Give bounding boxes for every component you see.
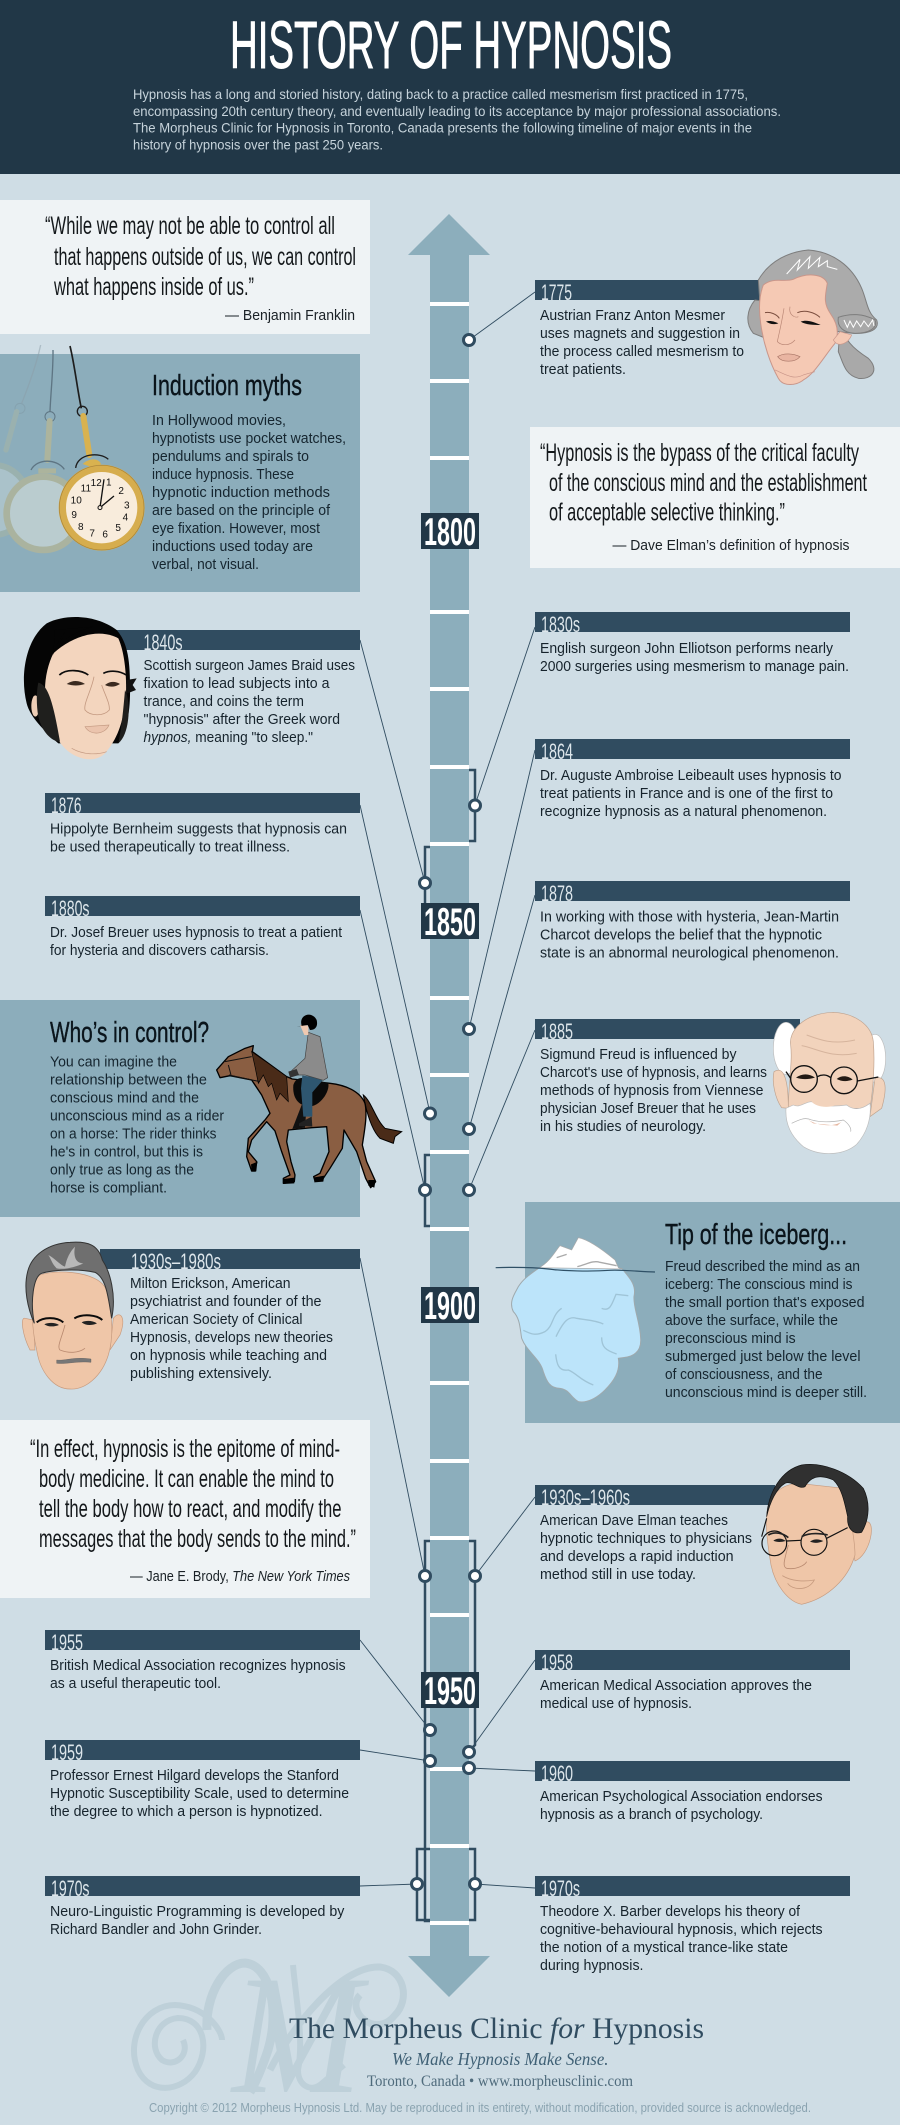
event: 1930s-1960s Dave Elman: 1930s–1960s	[541, 1485, 630, 1510]
event: 1970s Theodore Barber: the notion of a mystical trance-like state	[540, 1940, 788, 1956]
century marker 1950	[421, 1670, 479, 1713]
event: 1840s Braid: "hypnosis" after the Greek word	[144, 712, 340, 728]
event: 1885 Freud: Charcot's use of hypnosis, and learns	[540, 1065, 767, 1081]
body text: of consciousness, and the	[665, 1367, 823, 1383]
event: 1775 Mesmer: uses magnets and suggestion in	[540, 326, 740, 342]
event: 1880s Breuer	[45, 896, 360, 959]
event: 1878 Charcot: 1878	[541, 881, 573, 906]
event: 1878 Charcot: In working with those with hysteria, Jean-Martin	[540, 910, 839, 926]
body text: the small portion that's exposed	[665, 1295, 864, 1311]
panel: induction myths	[0, 345, 360, 592]
body text: he's in control, but this is	[50, 1144, 203, 1160]
event: 1775 Mesmer: 1775	[541, 280, 572, 305]
event: 1970s Theodore Barber: during hypnosis.	[540, 1958, 644, 1974]
quote: Benjamin Franklin	[0, 200, 370, 334]
icon: swinging pocket watches: 8	[78, 522, 84, 533]
event: 1840s Braid: hypnos, meaning "to sleep."	[144, 730, 313, 746]
icon: swinging pocket watches: 1	[106, 477, 112, 488]
icon: swinging pocket watches: 10	[71, 495, 82, 506]
event: 1970s Theodore Barber: 1970s	[541, 1876, 580, 1901]
body text: hypnotists use pocket watches,	[152, 431, 346, 447]
event: 1878 Charcot: state is an abnormal neurological phenomenon.	[540, 946, 839, 962]
body text	[665, 1259, 867, 1401]
body text: conscious mind and the	[50, 1090, 199, 1106]
event: 1885 Freud	[535, 1019, 800, 1135]
icon: swinging pocket watches: 7	[89, 529, 95, 540]
body text: on a horse: The rider thinks	[50, 1126, 216, 1142]
event: 1830s Elliotson	[535, 612, 850, 675]
illustration: horse and rider	[217, 1015, 402, 1188]
quote: Jane E. Brody: messages that the body sends to the mind.”	[39, 1525, 356, 1553]
event: 1959 Hilgard: the degree to which a person is hypnotized.	[50, 1804, 323, 1820]
body text: relationship between the	[50, 1072, 207, 1088]
icon: iceberg	[496, 1238, 655, 1402]
body text: iceberg: The conscious mind is	[665, 1277, 852, 1293]
body text: above the surface, while the	[665, 1313, 838, 1329]
event: 1885 Freud: Sigmund Freud is influenced by	[540, 1047, 737, 1063]
century marker 1900	[421, 1285, 479, 1328]
intro paragraph: history of hypnosis over the past 250 years.	[133, 136, 383, 152]
body text	[50, 1054, 224, 1196]
event: 1960 American Psychological Association: American Psychological Association endorses	[540, 1789, 823, 1805]
event: 1958 American Medical Association: medical use of hypnosis.	[540, 1696, 692, 1712]
body text: inductions used today are	[152, 539, 313, 555]
event: 1970s Neuro-Linguistic Programming: 1970s	[51, 1876, 90, 1901]
event: 1955 British Medical Association: 1955	[51, 1630, 83, 1655]
century marker 1950: 1950	[424, 1670, 476, 1713]
panel: tip of the iceberg	[496, 1202, 900, 1423]
panel: who's in control	[0, 1000, 360, 1217]
body text: induce hypnosis. These	[152, 467, 294, 483]
event: 1880s Breuer: Dr. Josef Breuer uses hypnosis to treat a patient	[50, 925, 342, 941]
quote: Jane E. Brody: “In effect, hypnosis is the epitome of mind-	[30, 1435, 340, 1463]
icon: swinging pocket watches: 9	[71, 510, 77, 521]
intro paragraph: encompassing 20th century theory, and eventually leading to its acceptance by major professional associations.	[133, 103, 781, 119]
intro paragraph	[133, 86, 781, 152]
quote: Jane E. Brody: body medicine. It can enable the mind to	[39, 1465, 334, 1493]
quote: Dave Elman	[530, 427, 900, 568]
footer logo monogram: M	[230, 1941, 370, 2125]
event: 1960 American Psychological Association	[535, 1761, 850, 1823]
timeline double-headed arrow	[408, 214, 490, 1997]
event: 1930s-1980s Erickson	[100, 1249, 360, 1382]
event: 1876 Bernheim	[45, 793, 360, 856]
event: 1970s Neuro-Linguistic Programming	[45, 1876, 360, 1938]
event: 1958 American Medical Association: 1958	[541, 1650, 573, 1675]
quote: Benjamin Franklin: — Benjamin Franklin	[225, 307, 355, 324]
body text: only true as long as the	[50, 1162, 194, 1178]
body text: You can imagine the	[50, 1054, 177, 1070]
body text: are based on the principle of	[152, 503, 331, 519]
event: 1930s-1960s Dave Elman: hypnotic techniques to physicians	[540, 1531, 752, 1547]
event: 1775 Mesmer: Austrian Franz Anton Mesmer	[540, 308, 725, 324]
body text: submerged just below the level	[665, 1349, 860, 1365]
quote: Benjamin Franklin: that happens outside of us, we can control	[54, 243, 356, 271]
quote: Jane E. Brody	[0, 1420, 370, 1598]
quote: Benjamin Franklin: what happens inside of us.”	[53, 273, 254, 301]
body text: hypnotic induction methods	[152, 485, 330, 501]
century marker 1850	[421, 901, 479, 944]
body text: unconscious mind as a rider	[50, 1108, 224, 1124]
body text: unconscious mind is deeper still.	[665, 1385, 867, 1401]
event: 1958 American Medical Association	[535, 1650, 850, 1712]
event: 1864 Liebeault	[535, 739, 850, 820]
event: 1930s-1980s Erickson: Milton Erickson, American	[130, 1276, 290, 1292]
event: 1864 Liebeault: Dr. Auguste Ambroise Leibeault uses hypnosis to	[540, 768, 842, 784]
event: 1930s-1980s Erickson: on hypnosis while teaching and	[130, 1348, 327, 1364]
event: 1775 Mesmer: treat patients.	[540, 362, 626, 378]
body text: preconscious mind is	[665, 1331, 796, 1347]
event: 1930s-1960s Dave Elman: method still in use today.	[540, 1567, 696, 1583]
event: 1880s Breuer: for hysteria and discovers catharsis.	[50, 943, 269, 959]
event: 1970s Neuro-Linguistic Programming: Neuro-Linguistic Programming is developed by	[50, 1904, 345, 1920]
period brackets	[417, 770, 475, 1921]
heading: Induction myths	[152, 370, 302, 402]
body text: horse is compliant.	[50, 1180, 167, 1196]
event: 1959 Hilgard: 1959	[51, 1740, 83, 1765]
portrait: Mesmer	[748, 250, 877, 385]
body text: pendulums and spirals to	[152, 449, 309, 465]
event: 1970s Theodore Barber: cognitive-behavioural hypnosis, which rejects	[540, 1922, 823, 1938]
icon: swinging pocket watches: 3	[124, 500, 130, 511]
event: 1878 Charcot	[535, 881, 850, 962]
intro paragraph: Hypnosis has a long and storied history, dating back to a practice called mesmerism first practiced in 1775,	[133, 86, 748, 102]
event: 1930s-1980s Erickson: Hypnosis, develops new theories	[130, 1330, 333, 1346]
event: 1775 Mesmer: the process called mesmerism to	[540, 344, 744, 360]
event: 1959 Hilgard: Professor Ernest Hilgard develops the Stanford	[50, 1768, 339, 1784]
quote: Benjamin Franklin: “While we may not be able to control all	[45, 212, 335, 240]
timeline markers	[412, 334, 480, 1890]
event: 1958 American Medical Association: American Medical Association approves the	[540, 1678, 812, 1694]
event: 1876 Bernheim: be used therapeutically to treat illness.	[50, 840, 290, 856]
event: 1840s Braid: 1840s	[144, 630, 182, 655]
icon: swinging pocket watches: 4	[123, 513, 129, 524]
event: 1864 Liebeault: recognize hypnosis as a natural phenomenon.	[540, 804, 827, 820]
event: 1955 British Medical Association: as a useful therapeutic tool.	[50, 1676, 221, 1692]
event: 1885 Freud: 1885	[541, 1019, 573, 1044]
footer tagline: We Make Hypnosis Make Sense.	[392, 2049, 608, 2069]
icon: swinging pocket watches: 6	[102, 529, 108, 540]
connector lines	[360, 292, 535, 1888]
body text: verbal, not visual.	[152, 557, 259, 573]
event: 1880s Breuer: 1880s	[51, 896, 90, 921]
century marker 1850: 1850	[424, 901, 476, 944]
event: 1959 Hilgard: Hypnotic Susceptibility Scale, used to determine	[50, 1786, 349, 1802]
quote: Dave Elman: — Dave Elman’s definition of hypnosis	[612, 537, 850, 554]
icon: swinging pocket watches	[0, 345, 144, 550]
icon: swinging pocket watches: 11	[81, 483, 91, 494]
header banner	[0, 0, 900, 174]
quote: Jane E. Brody: tell the body how to react, and modify the	[39, 1495, 342, 1523]
footer copyright: Copyright © 2012 Morpheus Hypnosis Ltd. May be reproduced in its entirety, without modification, provided source is acknowledged.	[149, 2101, 811, 2115]
century marker 1900: 1900	[424, 1285, 476, 1328]
portrait: Milton Erickson	[22, 1242, 123, 1389]
portrait: James Braid	[24, 617, 137, 759]
event: 1955 British Medical Association: British Medical Association recognizes hypnosis	[50, 1658, 346, 1674]
event: 1930s-1960s Dave Elman: and develops a rapid induction	[540, 1549, 734, 1565]
event: 1930s-1980s Erickson: 1930s–1980s	[131, 1249, 221, 1274]
body text	[152, 413, 346, 573]
intro paragraph: The Morpheus Clinic for Hypnosis in Toronto, Canada presents the following timeline of major events in the	[133, 120, 752, 136]
event: 1878 Charcot: Charcot develops the belief that the hypnotic	[540, 928, 822, 944]
event: 1960 American Psychological Association: 1960	[541, 1761, 573, 1786]
event: 1840s Braid: fixation to lead subjects into a	[144, 676, 330, 692]
event: 1930s-1980s Erickson: publishing extensively.	[130, 1366, 272, 1382]
heading: Who’s in control?	[50, 1017, 209, 1049]
body text: eye fixation. However, most	[152, 521, 320, 537]
quote: Dave Elman: of acceptable selective thinking.”	[549, 498, 785, 526]
event: 1830s Elliotson: 2000 surgeries using mesmerism to manage pain.	[540, 659, 849, 675]
century marker 1800	[421, 511, 479, 554]
footer clinic name: The Morpheus Clinic for Hypnosis	[289, 2012, 704, 2045]
event: 1830s Elliotson: 1830s	[541, 612, 580, 637]
event: 1830s Elliotson: English surgeon John Elliotson performs nearly	[540, 641, 834, 657]
event: 1930s-1980s Erickson: American Society of Clinical	[130, 1312, 302, 1328]
event: 1885 Freud: methods of hypnosis from Viennese	[540, 1083, 764, 1099]
event: 1840s Braid: trance, and coins the term	[144, 694, 304, 710]
event: 1960 American Psychological Association: hypnosis as a branch of psychology.	[540, 1807, 763, 1823]
event: 1970s Theodore Barber: Theodore X. Barber develops his theory of	[540, 1904, 801, 1920]
event: 1876 Bernheim: Hippolyte Bernheim suggests that hypnosis can	[50, 822, 347, 838]
event: 1970s Theodore Barber	[535, 1876, 850, 1974]
icon: swinging pocket watches: 12	[91, 478, 102, 489]
event: 1959 Hilgard	[45, 1740, 360, 1820]
event: 1864 Liebeault: treat patients in France and is one of the first to	[540, 786, 833, 802]
century marker 1800: 1800	[424, 511, 476, 554]
footer location and website: Toronto, Canada • www.morpheusclinic.com	[367, 2073, 633, 2090]
icon: swinging pocket watches: 2	[118, 486, 124, 497]
event: 1885 Freud: physician Josef Breuer that he uses	[540, 1101, 756, 1117]
icon: swinging pocket watches: 5	[115, 523, 121, 534]
event: 1930s-1960s Dave Elman: American Dave Elman teaches	[540, 1513, 728, 1529]
event: 1885 Freud: in his studies of neurology.	[540, 1119, 706, 1135]
portrait: Sigmund Freud	[773, 1012, 886, 1154]
event: 1955 British Medical Association	[45, 1630, 360, 1692]
footer logo monogram	[134, 1941, 403, 2125]
event: 1840s Braid	[115, 630, 360, 746]
body text: In Hollywood movies,	[152, 413, 286, 429]
event: 1864 Liebeault: 1864	[541, 739, 573, 764]
event: 1775 Mesmer	[535, 280, 765, 378]
body text: Freud described the mind as an	[665, 1259, 860, 1275]
quote: Jane E. Brody: — Jane E. Brody, The New York Times	[130, 1568, 350, 1585]
event: 1970s Neuro-Linguistic Programming: Richard Bandler and John Grinder.	[50, 1922, 262, 1938]
portrait: Dave Elman	[762, 1464, 871, 1604]
event: 1840s Braid: Scottish surgeon James Braid uses	[144, 658, 355, 674]
event: 1876 Bernheim: 1876	[51, 793, 82, 818]
event: 1930s-1980s Erickson: psychiatrist and founder of the	[130, 1294, 322, 1310]
event: 1930s-1960s Dave Elman	[535, 1485, 775, 1583]
